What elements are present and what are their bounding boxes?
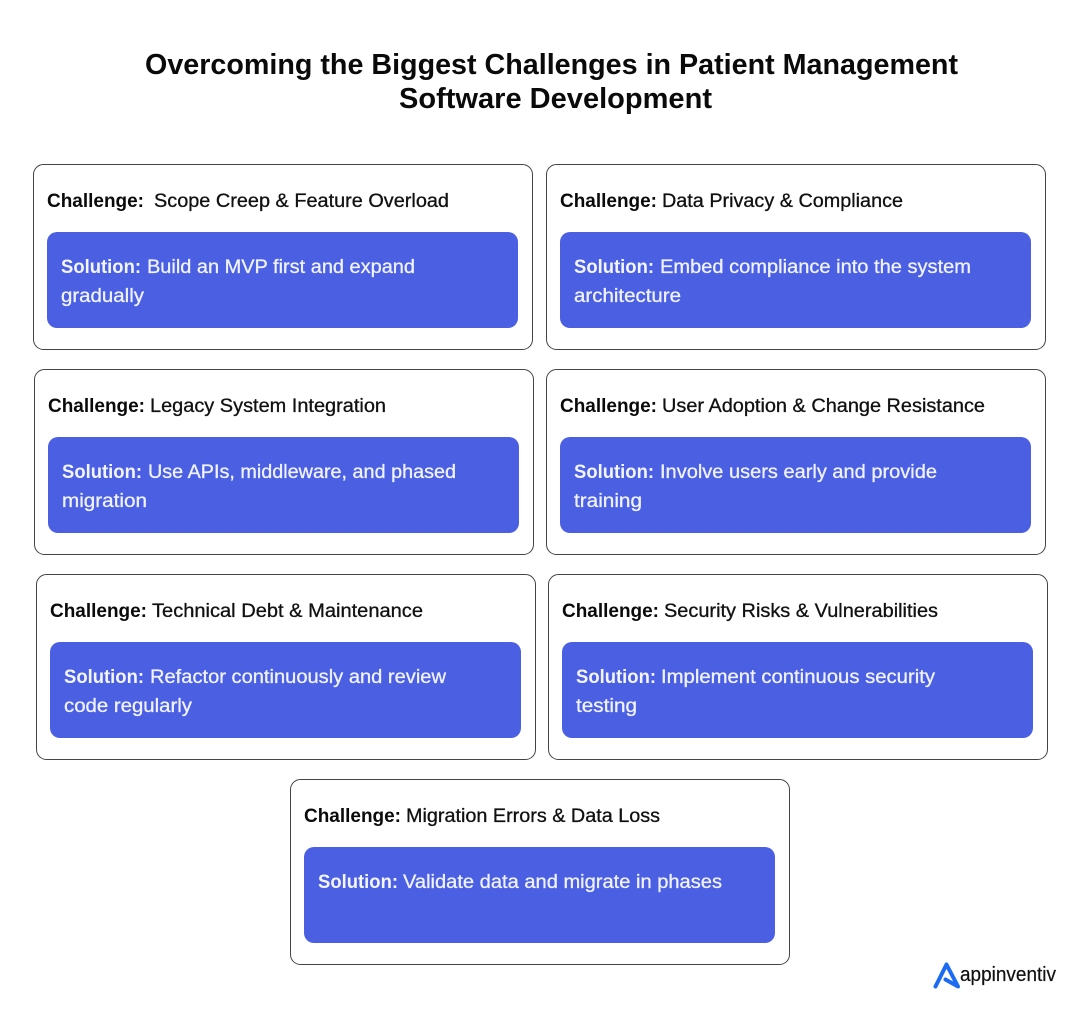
challenge heading: technical debt: Technical Debt & Maintenance: [152, 601, 423, 622]
challenge heading: migration errors: Migration Errors & Data Loss: [406, 806, 660, 827]
panel: migration errors and data loss: [290, 780, 790, 964]
challenge heading: scope creep: Scope Creep & Feature Overload: [154, 191, 449, 212]
solution box: involve users: training: [574, 491, 642, 512]
panel: security risks and vulnerabilities: [548, 574, 1048, 760]
solution box: security testing: Implement continuous security: [661, 667, 936, 688]
logo: appinventiv: appinventiv: [960, 964, 1056, 986]
solution box: refactor: code regularly: [64, 696, 193, 717]
solution box: involve users: [560, 437, 1031, 533]
solution box: involve users: Solution:: [574, 462, 654, 483]
challenge heading: security risks: [562, 601, 938, 622]
panel: technical debt and maintenance: [36, 574, 536, 760]
challenge heading: technical debt: [50, 601, 423, 622]
challenge heading: legacy system: Challenge:: [48, 396, 145, 417]
challenge heading: legacy system: Legacy System Integration: [150, 396, 386, 417]
solution box: involve users: Involve users early and provide: [660, 462, 937, 483]
panel: scope creep and feature overload: [34, 164, 532, 350]
solution box: validate data: [304, 847, 775, 943]
title: [145, 49, 958, 115]
panel: user adoption and change resistance: [546, 370, 1046, 554]
challenge heading: technical debt: Challenge:: [50, 601, 147, 622]
challenge heading: user adoption: User Adoption & Change Resistance: [662, 396, 985, 417]
solution box: build an MVP: gradually: [61, 286, 145, 307]
solution box: embed compliance: architecture: [574, 286, 681, 307]
title: Overcoming the Biggest Challenges in Patient Management: [145, 49, 958, 81]
title: Software Development: [399, 83, 712, 115]
challenge heading: migration errors: [304, 806, 660, 827]
solution box: build an MVP: Build an MVP first and expand: [147, 257, 415, 278]
solution box: security testing: [562, 642, 1033, 738]
icon: appinventiv triangle mark: [936, 964, 958, 986]
solution box: refactor: [50, 642, 521, 738]
challenge heading: scope creep: Challenge:: [47, 191, 144, 212]
solution box: build an MVP: [47, 232, 518, 328]
solution box: APIs and middleware: migration: [62, 491, 147, 512]
challenge heading: data privacy: Data Privacy & Compliance: [662, 191, 903, 212]
challenge heading: data privacy: [560, 191, 903, 212]
solution box: APIs and middleware: Use APIs, middleware, and phased: [148, 462, 456, 483]
solution box: security testing: testing: [576, 696, 637, 717]
challenge heading: security risks: Security Risks & Vulnerabilities: [664, 601, 938, 622]
solution box: embed compliance: Solution:: [574, 257, 654, 278]
challenge heading: data privacy: Challenge:: [560, 191, 657, 212]
solution box: refactor: Refactor continuously and review: [150, 667, 446, 688]
solution box: embed compliance: [560, 232, 1031, 328]
solution box: validate data: Validate data and migrate in phases: [403, 872, 722, 893]
solution box: build an MVP: Solution:: [61, 257, 141, 278]
panel: legacy system integration: [34, 370, 534, 554]
solution box: security testing: Solution:: [576, 667, 656, 688]
challenge heading: security risks: Challenge:: [562, 601, 659, 622]
solution box: refactor: Solution:: [64, 667, 144, 688]
solution box: APIs and middleware: [48, 437, 519, 533]
panel: data privacy and compliance: [546, 164, 1046, 350]
challenge heading: migration errors: Challenge:: [304, 806, 401, 827]
solution box: APIs and middleware: Solution:: [62, 462, 142, 483]
solution box: validate data: Solution:: [318, 872, 398, 893]
solution box: embed compliance: Embed compliance into the system: [660, 257, 971, 278]
challenge heading: legacy system: [48, 396, 386, 417]
challenge heading: user adoption: Challenge:: [560, 396, 657, 417]
